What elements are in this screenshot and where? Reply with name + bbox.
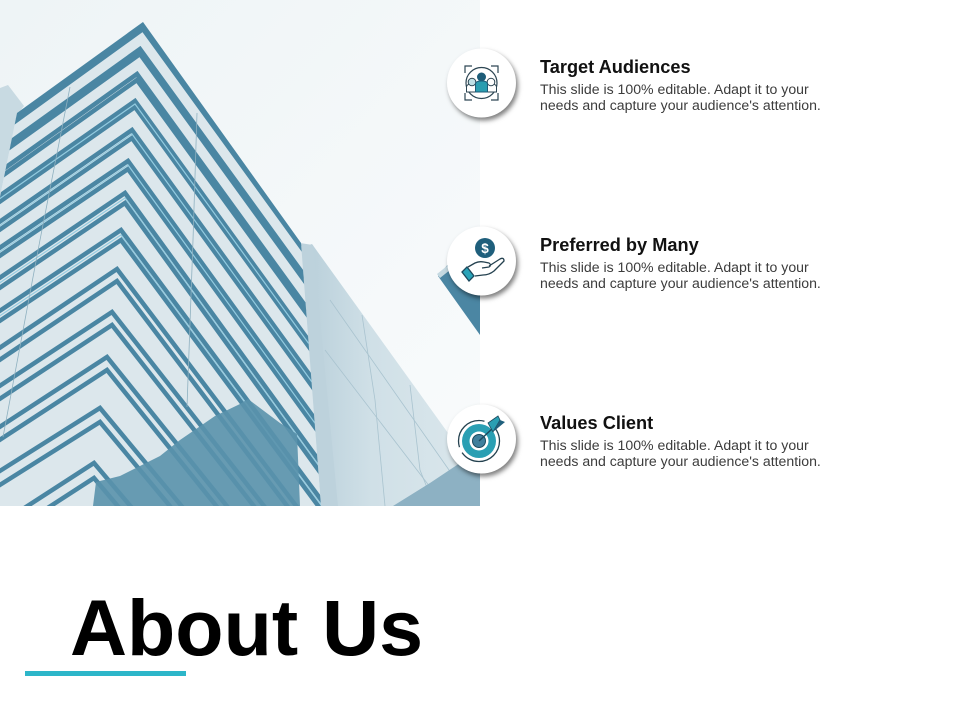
icon badge: preferred by many: $: [481, 241, 489, 256]
text block: values client: Values Client: [540, 413, 653, 433]
text block: target audiences: This slide is 100% editable. Adapt it to your: [540, 80, 809, 96]
title underline: [25, 671, 186, 676]
text block: target audiences: Target Audiences: [540, 57, 691, 77]
icon badge: preferred by many: [446, 226, 522, 302]
text block: preferred by many: needs and capture your audience's attention.: [540, 275, 821, 291]
text block: values client: [540, 413, 821, 469]
text block: target audiences: [540, 57, 821, 113]
icon badge: target audiences: [446, 48, 522, 124]
text block: values client: needs and capture your audience's attention.: [540, 453, 821, 469]
text block: preferred by many: Preferred by Many: [540, 235, 699, 255]
text block: preferred by many: [540, 235, 821, 291]
text block: target audiences: needs and capture your audience's attention.: [540, 97, 821, 113]
icon badge: values client: [446, 404, 522, 480]
building photo: [0, 0, 480, 506]
title: About Us: [70, 583, 423, 672]
text block: preferred by many: This slide is 100% editable. Adapt it to your: [540, 258, 809, 274]
text block: values client: This slide is 100% editable. Adapt it to your: [540, 436, 809, 452]
